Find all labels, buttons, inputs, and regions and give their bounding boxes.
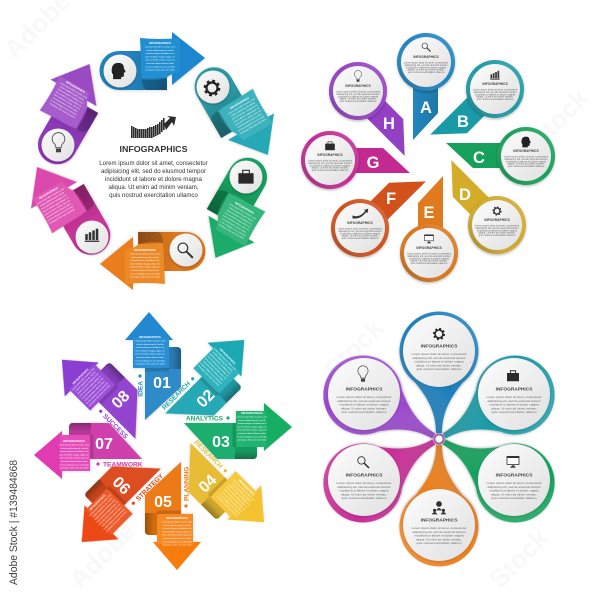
- label TEAMWORK: TEAMWORK: [103, 461, 143, 468]
- paper text 03: is nisi ut aliquip ex ea commodo: [237, 435, 268, 438]
- paper text: green: eiusmod tempor incididunt ut la: [226, 209, 253, 226]
- petal: orange: [400, 445, 478, 566]
- letter C: C: [473, 149, 485, 167]
- card: top: Lorem ipsum dolor sit amet, consectetur: [411, 352, 467, 356]
- paper text: blue: bore et dolore magna aliqua. Ut: [145, 55, 175, 58]
- circle E: INFOGRAPHICS: [416, 246, 442, 250]
- paper text 04: consequat. Duis aute irure dolor: [216, 495, 239, 518]
- card: lower right: incididunt ut labore et dolore magna: [489, 489, 539, 493]
- label STRATEGY: STRATEGY: [135, 472, 165, 503]
- paper text 04: Lorem ipsum dolor sit amet, cons: [232, 478, 256, 502]
- card: upper right: quis nostrud exercitation ullamco: [491, 410, 537, 414]
- paper text: purple: Lorem ipsum dolor sit amet, cons: [59, 82, 88, 99]
- paper text: pink: consequat. Duis aute irure dolor: [49, 208, 76, 225]
- circle A: [397, 33, 455, 91]
- paper text 06: eiusmod tempor incididunt ut la: [94, 498, 117, 521]
- circle E: adipisicing elit, sed do eiusmod tempor: [407, 255, 451, 258]
- paper text 02: eiusmod tempor incididunt ut la: [209, 353, 232, 376]
- paper text: orange: INFOGRAPHICS: [134, 248, 156, 252]
- paper text: teal: trud exercitation ullamco labor: [237, 112, 263, 129]
- card: top: aliqua. Ut enim ad minim veniam,: [416, 363, 462, 367]
- paper text 01: eiusmod tempor incididunt ut la: [136, 346, 165, 349]
- number 08: 08: [109, 388, 133, 412]
- letter D: D: [459, 186, 471, 204]
- circle A: Lorem ipsum dolor sit amet, consectetur: [404, 62, 448, 64]
- paper text: pink: trud exercitation ullamco labor: [46, 202, 72, 219]
- circle E: aliqua. Ut enim ad minim veniam,: [411, 260, 448, 263]
- circle H: adipisicing elit, sed do eiusmod tempor: [336, 93, 380, 96]
- paper text 05: is nisi ut aliquip ex ea commodo: [162, 540, 193, 543]
- paper text 01: INFOGRAPHICS: [139, 335, 161, 339]
- paper text: pink: eiusmod tempor incididunt ut la: [41, 193, 68, 211]
- paper text 08: is nisi ut aliquip ex ea commodo: [86, 381, 109, 405]
- arrow 08: [45, 337, 161, 453]
- paper text: purple: is nisi ut aliquip ex ea commodo: [50, 99, 78, 117]
- circle C: INFOGRAPHICS: [513, 149, 539, 153]
- number 04: 04: [196, 472, 220, 496]
- circle D: quis nostrud exercitation ullamco: [479, 234, 516, 237]
- panel: six petal teardrops: [309, 312, 569, 566]
- circle F: adipisicing elit, sed do eiusmod tempor: [338, 230, 382, 233]
- card: upper right: adipisicing elit, sed do eiusmod tempor: [487, 399, 541, 403]
- arrow 07: [34, 423, 142, 479]
- icon badge: search: [170, 234, 202, 266]
- number 03: 03: [212, 434, 230, 451]
- letter G: G: [367, 154, 379, 172]
- label ANALYTICS: ANALYTICS: [186, 415, 224, 422]
- paper text 07: INFOGRAPHICS: [63, 439, 85, 443]
- paper text 05: bore et dolore magna aliqua. Ut: [162, 530, 192, 533]
- card: lower left: incididunt ut labore et dolore magna: [339, 489, 389, 493]
- paper text 07: is nisi ut aliquip ex ea commodo: [59, 463, 90, 466]
- paper text: orange: enim ad minim veniam, quis nos: [130, 267, 160, 269]
- center body text: adipisicing elit, sed do eiusmod tempor: [101, 168, 206, 175]
- center body text: aliqua. Ut enim ad minim veniam,: [108, 184, 199, 191]
- card: upper right: Lorem ipsum dolor sit amet, consectetur: [486, 395, 542, 399]
- paper text: orange: Lorem ipsum dolor sit amet, cons: [130, 252, 160, 256]
- paper text 02: trud exercitation ullamco labor: [202, 360, 224, 382]
- paper text: orange: ectetur adipisicing elit, sed do: [131, 256, 159, 259]
- watermark: Stock: [523, 83, 595, 154]
- label RESEARCH: RESEARCH: [192, 439, 224, 470]
- paper text: teal: INFOGRAPHICS: [229, 96, 250, 110]
- icon badge: gear: [196, 70, 230, 104]
- card: upper right: aliqua. Ut enim ad minim veniam,: [491, 406, 537, 410]
- label SUCCESS: SUCCESS: [101, 413, 129, 441]
- center hub: [434, 434, 444, 444]
- card: top: adipisicing elit, sed do eiusmod tempor: [412, 356, 466, 360]
- circle H: Lorem ipsum dolor sit amet, consectetur: [336, 90, 380, 94]
- card: lower right: quis nostrud exercitation ullamco: [491, 496, 537, 500]
- paper text 08: enim ad minim veniam, quis nos: [82, 378, 104, 400]
- paper text: green: enim ad minim veniam, quis nos: [222, 215, 249, 232]
- stem A: [413, 86, 438, 140]
- circle B: aliqua. Ut enim ad minim veniam,: [477, 96, 514, 99]
- card: upper left: incididunt ut labore et dolore magna: [339, 403, 389, 407]
- paper text 08: trud exercitation ullamco labor: [84, 380, 106, 402]
- paper text 05: ectetur adipisicing elit, sed do: [163, 524, 191, 527]
- paper text: teal: eiusmod tempor incididunt ut la: [232, 103, 259, 121]
- paper text: blue: eiusmod tempor incididunt ut la: [146, 52, 175, 55]
- paper text 04: eiusmod tempor incididunt ut la: [228, 484, 251, 507]
- circle A: adipisicing elit, sed do eiusmod tempor: [404, 64, 448, 67]
- circle G: aliqua. Ut enim ad minim veniam,: [312, 167, 349, 170]
- circle B: [466, 60, 524, 118]
- circle A: aliqua. Ut enim ad minim veniam,: [408, 69, 445, 72]
- circle B: adipisicing elit, sed do eiusmod tempor: [473, 91, 517, 94]
- card: lower right: aliqua. Ut enim ad minim veniam,: [491, 492, 537, 496]
- circle F: quis nostrud exercitation ullamco: [342, 237, 379, 240]
- circle D: aliqua. Ut enim ad minim veniam,: [479, 232, 516, 235]
- paper text 08: consequat. Duis aute irure dolor: [88, 384, 111, 407]
- paper text: blue: Lorem ipsum dolor sit amet, cons: [145, 46, 175, 48]
- circle A: quis nostrud exercitation ullamco: [408, 71, 445, 74]
- paper text: green: Lorem ipsum dolor sit amet, cons: [228, 203, 257, 220]
- paper text: orange: is nisi ut aliquip ex ea commodo: [130, 272, 161, 275]
- paper text 08: eiusmod tempor incididunt ut la: [77, 372, 100, 395]
- circle C: adipisicing elit, sed do eiusmod tempor: [504, 158, 548, 161]
- letter A: A: [420, 99, 432, 117]
- card: bottom: incididunt ut labore et dolore magna: [414, 534, 464, 538]
- paper text 02: consequat. Duis aute irure dolor: [197, 364, 220, 387]
- label IDEA: IDEA: [137, 381, 144, 397]
- card: bottom: [403, 489, 475, 561]
- circle B: INFOGRAPHICS: [482, 82, 508, 86]
- card: lower right: Lorem ipsum dolor sit amet, consectetur: [486, 481, 542, 485]
- circle C: incididunt ut labore et dolore magna: [506, 160, 546, 163]
- paper text 06: ectetur adipisicing elit, sed do: [92, 496, 114, 518]
- letter F: F: [386, 190, 396, 208]
- circle B: Lorem ipsum dolor sit amet, consectetur: [473, 88, 517, 92]
- paper text: purple: bore et dolore magna aliqua. Ut: [55, 90, 82, 108]
- card: upper left: quis nostrud exercitation ullamco: [341, 410, 387, 414]
- paper text 07: consequat. Duis aute irure dolor: [59, 467, 89, 470]
- circle A: incididunt ut labore et dolore magna: [406, 66, 446, 69]
- paper text: pink: Lorem ipsum dolor sit amet, cons: [36, 188, 65, 205]
- paper text: teal: Lorem ipsum dolor sit amet, cons: [227, 98, 256, 115]
- circle H: [329, 62, 387, 120]
- petal: green: [424, 408, 569, 537]
- paper text 08: bore et dolore magna aliqua. Ut: [79, 375, 102, 398]
- circle G: Lorem ipsum dolor sit amet, consectetur: [308, 160, 352, 162]
- stem C: [446, 143, 500, 168]
- paper text 02: bore et dolore magna aliqua. Ut: [206, 355, 229, 378]
- arrow 05: [145, 462, 201, 570]
- paper text 03: Lorem ipsum dolor sit amet, cons: [237, 416, 267, 418]
- circle C: quis nostrud exercitation ullamco: [508, 165, 545, 168]
- paper text: purple: INFOGRAPHICS: [65, 80, 86, 94]
- label PLANNING: PLANNING: [183, 467, 190, 501]
- paper text 06: Lorem ipsum dolor sit amet, cons: [88, 493, 112, 517]
- label RESEARCH: RESEARCH: [161, 380, 192, 412]
- paper text 05: consequat. Duis aute irure dolor: [162, 544, 192, 547]
- paper text: pink: is nisi ut aliquip ex ea commodo: [47, 205, 75, 222]
- paper text: teal: enim ad minim veniam, quis nos: [235, 110, 262, 127]
- panel: numbered arrows 01 to 08: [34, 312, 292, 570]
- paper text 03: eiusmod tempor incididunt ut la: [238, 422, 267, 425]
- paper text: blue: trud exercitation ullamco labor: [146, 62, 174, 65]
- circle D: incididunt ut labore et dolore magna: [477, 229, 517, 232]
- panel: lettered pinwheel A to H: [301, 33, 555, 282]
- paper text 05: trud exercitation ullamco labor: [163, 537, 191, 540]
- circle G: adipisicing elit, sed do eiusmod tempor: [308, 162, 352, 165]
- paper text 06: trud exercitation ullamco labor: [101, 506, 123, 528]
- center body text: quis nostrud exercitation ullamco: [109, 192, 198, 199]
- circle H: incididunt ut labore et dolore magna: [338, 95, 378, 98]
- card: upper left: [328, 358, 400, 430]
- paper text: orange: consequat. Duis aute irure dolor: [130, 276, 160, 279]
- card: lower left: Lorem ipsum dolor sit amet, consectetur: [336, 481, 392, 485]
- number 01: 01: [153, 375, 171, 392]
- petal: purple: [309, 341, 454, 470]
- arrow: green: [188, 151, 291, 271]
- card: bottom: INFOGRAPHICS: [421, 518, 458, 524]
- card: upper right: incididunt ut labore et dolore magna: [489, 403, 539, 407]
- paper text 01: Lorem ipsum dolor sit amet, cons: [135, 340, 165, 342]
- circle F: [331, 199, 389, 257]
- paper text 05: Lorem ipsum dolor sit amet, cons: [162, 520, 192, 524]
- paper text 04: bore et dolore magna aliqua. Ut: [225, 486, 248, 509]
- paper text 03: enim ad minim veniam, quis nos: [237, 430, 267, 432]
- paper text 03: INFOGRAPHICS: [241, 411, 263, 415]
- circle C: aliqua. Ut enim ad minim veniam,: [508, 163, 545, 166]
- circle F: Lorem ipsum dolor sit amet, consectetur: [338, 228, 382, 230]
- card: lower left: adipisicing elit, sed do eiusmod tempor: [337, 485, 391, 489]
- watermark: Stock: [483, 523, 555, 594]
- card: lower left: quis nostrud exercitation ullamco: [341, 496, 387, 500]
- center heading: INFOGRAPHICS: [120, 145, 188, 154]
- letter B: B: [457, 113, 469, 131]
- stem F: [370, 164, 426, 220]
- paper text: orange: trud exercitation ullamco labor: [131, 269, 159, 272]
- card: lower right: adipisicing elit, sed do eiusmod tempor: [487, 485, 541, 489]
- card: lower left: [328, 444, 400, 516]
- arrow: pink: [15, 151, 118, 271]
- paper text: blue: ectetur adipisicing elit, sed do: [146, 49, 174, 52]
- paper text 04: enim ad minim veniam, quis nos: [223, 489, 245, 511]
- paper text: green: consequat. Duis aute irure dolor: [217, 223, 245, 240]
- number 07: 07: [95, 436, 113, 453]
- circle C: Lorem ipsum dolor sit amet, consectetur: [504, 156, 548, 158]
- stem B: [430, 96, 486, 152]
- arrow 02: [151, 323, 267, 439]
- paper text: blue: consequat. Duis aute irure dolor: [145, 69, 175, 72]
- paper text 03: consequat. Duis aute irure dolor: [237, 439, 267, 442]
- paper text 06: enim ad minim veniam, quis nos: [99, 504, 121, 526]
- paper text 07: bore et dolore magna aliqua. Ut: [59, 453, 89, 456]
- card: upper left: Lorem ipsum dolor sit amet, consectetur: [336, 395, 392, 399]
- circle H: aliqua. Ut enim ad minim veniam,: [340, 98, 377, 101]
- paper text: green: INFOGRAPHICS: [234, 201, 255, 215]
- card: top: [403, 315, 475, 387]
- paper text 05: enim ad minim veniam, quis nos: [162, 535, 192, 537]
- circle G: incididunt ut labore et dolore magna: [310, 164, 350, 167]
- arrow: teal: [187, 51, 290, 171]
- paper text: blue: is nisi ut aliquip ex ea commodo: [145, 65, 176, 68]
- arrow 01: [125, 312, 181, 420]
- paper text 02: enim ad minim veniam, quis nos: [204, 358, 226, 380]
- arrow 03: [184, 403, 292, 459]
- paper text: purple: consequat. Duis aute irure dolor: [48, 102, 76, 119]
- arrow 04: [165, 429, 281, 545]
- icon badge: briefcase: [230, 160, 262, 194]
- card: lower left: INFOGRAPHICS: [346, 472, 383, 478]
- paper text: orange: eiusmod tempor incididunt ut la: [131, 259, 160, 262]
- arrow: blue: [100, 32, 205, 90]
- paper text: green: is nisi ut aliquip ex ea commodo: [219, 220, 247, 238]
- card: bottom: aliqua. Ut enim ad minim veniam,: [416, 537, 462, 541]
- circle F: INFOGRAPHICS: [347, 221, 373, 225]
- circle E: [400, 224, 458, 282]
- paper text: purple: enim ad minim veniam, quis nos: [53, 94, 80, 111]
- letter E: E: [423, 204, 435, 222]
- circle H: INFOGRAPHICS: [345, 84, 371, 88]
- circle E: Lorem ipsum dolor sit amet, consectetur: [407, 252, 451, 256]
- paper text 03: ectetur adipisicing elit, sed do: [238, 419, 266, 422]
- paper text 04: is nisi ut aliquip ex ea commodo: [218, 493, 242, 516]
- stock id caption: Adobe Stock | #139484868: [8, 460, 20, 585]
- circle D: [468, 196, 526, 254]
- paper text 06: INFOGRAPHICS: [88, 493, 106, 511]
- paper text 01: is nisi ut aliquip ex ea commodo: [135, 359, 166, 362]
- paper text: orange: bore et dolore magna aliqua. Ut: [130, 262, 160, 265]
- circle B: incididunt ut labore et dolore magna: [475, 93, 515, 96]
- paper text: pink: bore et dolore magna aliqua. Ut: [42, 196, 69, 214]
- card: upper right: [478, 358, 550, 430]
- card: top: quis nostrud exercitation ullamco: [416, 367, 462, 371]
- watermark: Stock: [318, 313, 390, 384]
- number 06: 06: [109, 474, 133, 498]
- paper text: purple: trud exercitation ullamco labor: [52, 97, 78, 113]
- paper text 01: bore et dolore magna aliqua. Ut: [135, 349, 165, 352]
- panel: circular arrow infographic: [14, 32, 291, 290]
- paper text 01: enim ad minim veniam, quis nos: [135, 354, 165, 356]
- paper text: green: ectetur adipisicing elit, sed do: [228, 206, 254, 223]
- stem H: [366, 100, 422, 156]
- paper text 03: trud exercitation ullamco labor: [238, 432, 266, 435]
- card: upper left: adipisicing elit, sed do eiusmod tempor: [337, 399, 391, 403]
- circle D: INFOGRAPHICS: [484, 218, 510, 222]
- paper text: blue: INFOGRAPHICS: [149, 41, 171, 45]
- paper text: purple: eiusmod tempor incididunt ut la: [57, 88, 84, 105]
- paper text: teal: is nisi ut aliquip ex ea commodo: [238, 115, 266, 132]
- paper text 07: trud exercitation ullamco labor: [60, 460, 88, 463]
- circle G: INFOGRAPHICS: [317, 153, 343, 157]
- circle D: Lorem ipsum dolor sit amet, consectetur: [475, 224, 519, 228]
- circle D: adipisicing elit, sed do eiusmod tempor: [475, 227, 519, 230]
- card: upper left: aliqua. Ut enim ad minim veniam,: [341, 406, 387, 410]
- petal: blue: [400, 312, 478, 433]
- paper text 07: eiusmod tempor incididunt ut la: [60, 450, 89, 453]
- paper text 08: INFOGRAPHICS: [71, 367, 89, 385]
- paper text 06: bore et dolore magna aliqua. Ut: [96, 501, 119, 524]
- circle G: [301, 131, 359, 189]
- paper text 04: ectetur adipisicing elit, sed do: [231, 482, 253, 504]
- paper text: blue: enim ad minim veniam, quis nos: [145, 60, 175, 62]
- circle A: INFOGRAPHICS: [413, 55, 439, 59]
- stem D: [434, 160, 490, 216]
- paper text 01: consequat. Duis aute irure dolor: [135, 363, 165, 366]
- arrow 06: [59, 443, 175, 559]
- stem E: [418, 176, 443, 230]
- card: top: incididunt ut labore et dolore magna: [414, 360, 464, 364]
- card: upper right: INFOGRAPHICS: [496, 386, 533, 392]
- paper text 04: trud exercitation ullamco labor: [221, 491, 243, 513]
- paper text: teal: bore et dolore magna aliqua. Ut: [233, 106, 260, 124]
- card: lower right: INFOGRAPHICS: [496, 472, 533, 478]
- watermark: Adobe: [63, 516, 141, 594]
- paper text: pink: ectetur adipisicing elit, sed do: [40, 191, 65, 207]
- center body text: incididunt ut labore et dolore magna: [105, 176, 203, 183]
- arrow: purple: [14, 51, 117, 171]
- paper text 07: Lorem ipsum dolor sit amet, cons: [59, 444, 89, 446]
- card: lower right: [478, 444, 550, 516]
- letter H: H: [383, 115, 395, 133]
- paper text: green: bore et dolore magna aliqua. Ut: [224, 211, 251, 229]
- paper text 02: Lorem ipsum dolor sit amet, cons: [213, 347, 237, 371]
- number 05: 05: [154, 494, 172, 511]
- card: bottom: adipisicing elit, sed do eiusmod tempor: [412, 530, 466, 534]
- paper text 05: eiusmod tempor incididunt ut la: [163, 527, 192, 530]
- paper text 01: trud exercitation ullamco labor: [136, 356, 164, 359]
- circle H: quis nostrud exercitation ullamco: [340, 100, 377, 103]
- paper text 03: bore et dolore magna aliqua. Ut: [237, 425, 267, 428]
- petal: magenta: [309, 408, 454, 537]
- paper text 08: ectetur adipisicing elit, sed do: [75, 370, 97, 392]
- stem G: [356, 148, 410, 173]
- paper text 02: ectetur adipisicing elit, sed do: [212, 351, 234, 373]
- arrow: orange: [100, 232, 206, 290]
- paper text: purple: ectetur adipisicing elit, sed do: [59, 85, 85, 102]
- card: bottom: quis nostrud exercitation ullamco: [416, 541, 462, 545]
- circle G: quis nostrud exercitation ullamco: [312, 169, 349, 172]
- card: upper left: INFOGRAPHICS: [346, 386, 383, 392]
- paper text 07: ectetur adipisicing elit, sed do: [60, 447, 88, 450]
- paper text 05: INFOGRAPHICS: [166, 516, 188, 520]
- paper text 02: is nisi ut aliquip ex ea commodo: [199, 362, 223, 385]
- paper text 07: enim ad minim veniam, quis nos: [59, 458, 89, 460]
- icon badge: bars: [76, 220, 108, 254]
- paper text: green: trud exercitation ullamco labor: [221, 218, 247, 234]
- circle F: incididunt ut labore et dolore magna: [340, 232, 380, 235]
- circle B: quis nostrud exercitation ullamco: [477, 98, 514, 101]
- card: top: INFOGRAPHICS: [421, 344, 458, 350]
- icon: rising bars with arrow: [131, 116, 176, 138]
- center body text: Lorem ipsum dolor sit amet, consectetur: [99, 160, 208, 167]
- card: lower left: aliqua. Ut enim ad minim veniam,: [341, 492, 387, 496]
- number 02: 02: [194, 387, 218, 411]
- paper text 01: ectetur adipisicing elit, sed do: [136, 343, 164, 346]
- card: bottom: Lorem ipsum dolor sit amet, consectetur: [411, 526, 467, 530]
- paper text 06: is nisi ut aliquip ex ea commodo: [103, 507, 126, 531]
- paper text 08: Lorem ipsum dolor sit amet, cons: [71, 367, 95, 391]
- petal: teal: [424, 341, 569, 470]
- paper text 06: consequat. Duis aute irure dolor: [105, 510, 128, 533]
- circle F: aliqua. Ut enim ad minim veniam,: [342, 235, 379, 238]
- icon badge: head: [104, 54, 136, 88]
- paper text: teal: consequat. Duis aute irure dolor: [240, 118, 267, 135]
- circle E: incididunt ut labore et dolore magna: [409, 257, 449, 260]
- icon badge: bulb: [42, 128, 74, 162]
- circle E: quis nostrud exercitation ullamco: [411, 262, 448, 265]
- circle C: [497, 127, 555, 185]
- paper text: pink: enim ad minim veniam, quis nos: [44, 200, 71, 217]
- paper text 04: INFOGRAPHICS: [238, 478, 256, 496]
- paper text: pink: INFOGRAPHICS: [38, 186, 59, 200]
- paper text 02: INFOGRAPHICS: [219, 347, 237, 365]
- paper text: teal: ectetur adipisicing elit, sed do: [231, 101, 256, 117]
